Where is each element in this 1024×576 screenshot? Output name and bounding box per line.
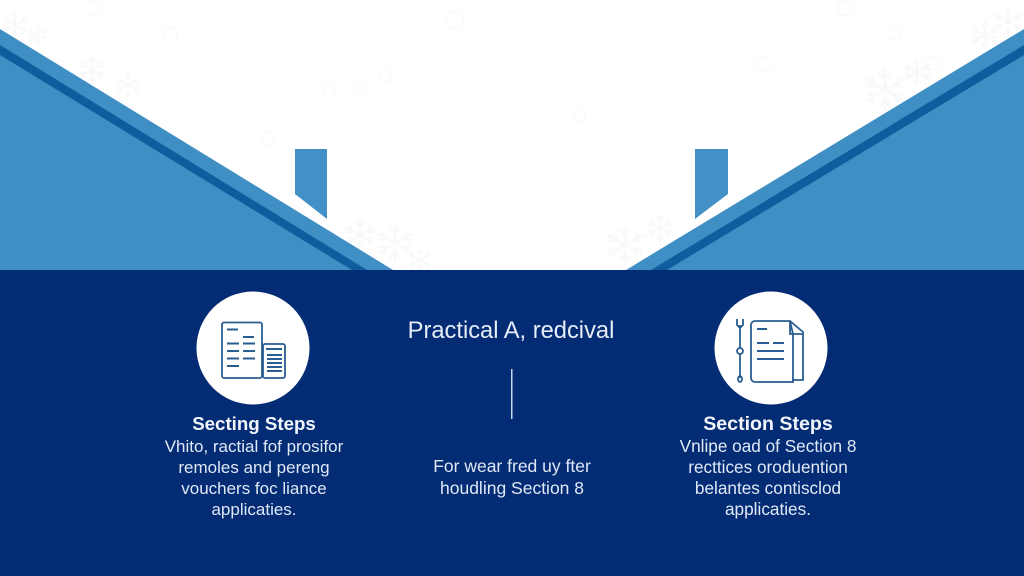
right chimney bbox=[695, 149, 728, 219]
left column text bbox=[164, 413, 343, 519]
right icon: document with tool bbox=[714, 292, 828, 404]
center heading: Practical A, redcival bbox=[408, 318, 614, 344]
center divider bbox=[511, 369, 512, 419]
right body: Vnlipe oad of Section 8 bbox=[680, 436, 856, 456]
right body: recttices oroduention bbox=[688, 457, 848, 477]
left heading: Secting Steps bbox=[192, 413, 316, 434]
center text: houdling Section 8 bbox=[440, 478, 584, 498]
left body: applicaties. bbox=[211, 500, 297, 519]
center text bbox=[433, 456, 591, 498]
left body: remoles and pereng bbox=[178, 458, 330, 477]
right body: belantes contisclod bbox=[695, 478, 841, 498]
right body bbox=[680, 436, 856, 519]
left body: Vhito, ractial fof prosifor bbox=[165, 437, 343, 456]
left roof bbox=[0, 29, 393, 270]
right roof bbox=[626, 29, 1024, 270]
left chimney bbox=[295, 149, 327, 219]
right column text bbox=[680, 413, 856, 519]
navy lower panel bbox=[0, 270, 1024, 576]
right heading: Section Steps bbox=[703, 413, 833, 435]
left body bbox=[164, 437, 343, 519]
center text: For wear fred uy fter bbox=[433, 456, 591, 476]
left icon: documents bbox=[196, 292, 310, 404]
left body: vouchers foc liance bbox=[181, 479, 327, 498]
right body: applicaties. bbox=[725, 499, 811, 519]
